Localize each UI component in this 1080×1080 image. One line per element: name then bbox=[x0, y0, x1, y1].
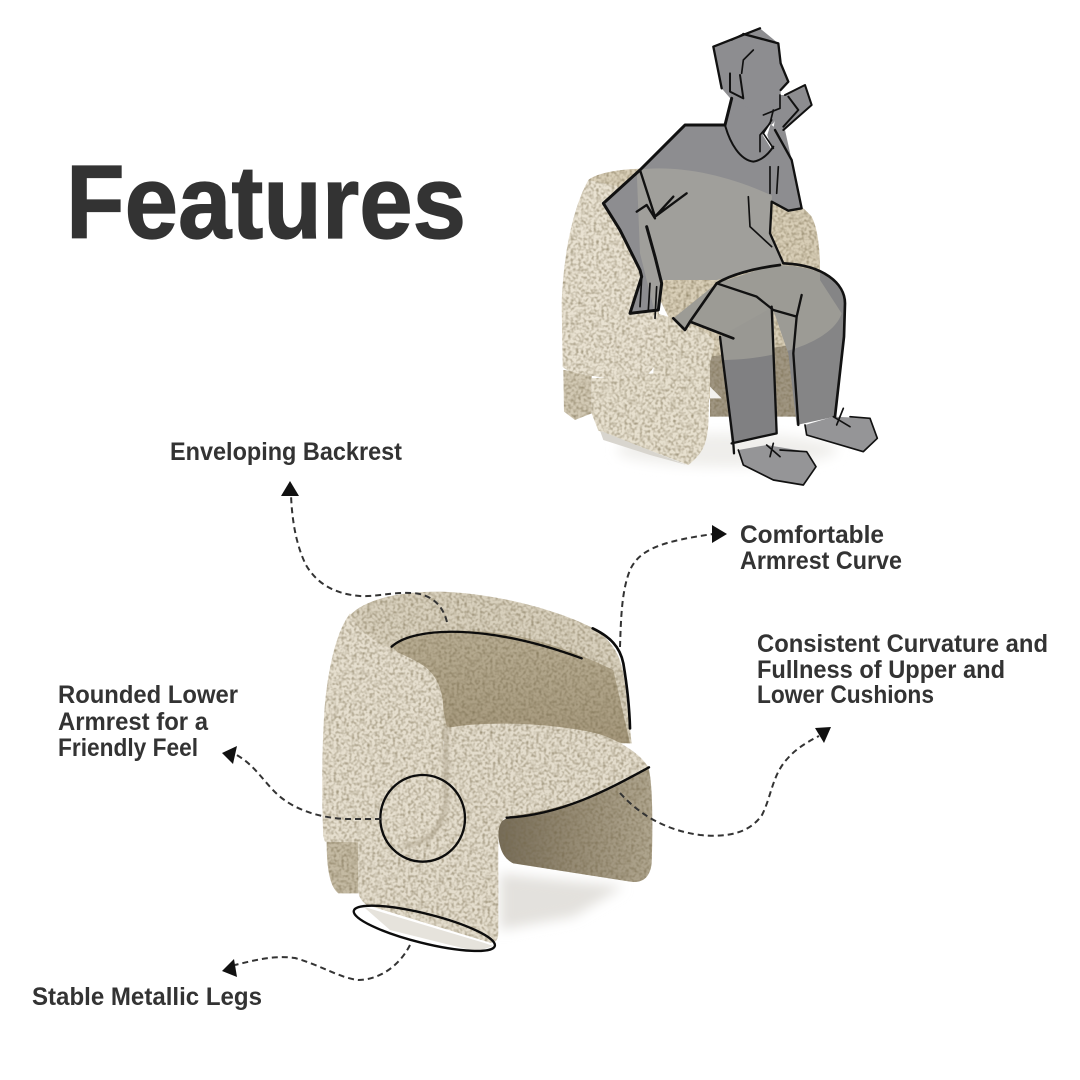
person ink outline bbox=[603, 28, 877, 485]
arrow: lower armrest bbox=[222, 746, 381, 819]
label: lower armrest bbox=[58, 681, 238, 762]
label: cushions: Lower Cushions bbox=[757, 681, 934, 709]
arrow: cushions bbox=[620, 727, 831, 836]
ellipse: metallic leg bbox=[350, 897, 498, 960]
person silhouette bbox=[603, 28, 877, 485]
metal leg base bbox=[363, 907, 493, 952]
arm crease shadow bbox=[403, 727, 446, 846]
label: metallic legs: Stable Metallic Legs bbox=[32, 983, 262, 1011]
label: cushions bbox=[757, 630, 1048, 709]
chair body bbox=[322, 592, 652, 943]
arrow: metallic legs bbox=[222, 945, 410, 980]
lower annotated chair bbox=[322, 592, 652, 960]
label: armrest curve: Armrest Curve bbox=[740, 547, 902, 575]
floor shadow bbox=[500, 873, 623, 930]
label: cushions: Consistent Curvature and bbox=[757, 630, 1048, 658]
highlight lines bbox=[392, 628, 649, 818]
circle: lower armrest bbox=[380, 775, 465, 862]
label: armrest curve: Comfortable bbox=[740, 521, 884, 549]
title: Features bbox=[66, 145, 466, 261]
label: lower armrest: Friendly Feel bbox=[58, 734, 198, 762]
label: lower armrest: Rounded Lower bbox=[58, 681, 238, 709]
label: enveloping backrest: Enveloping Backrest bbox=[170, 438, 403, 466]
illustration: sitting person on chair bbox=[562, 28, 877, 485]
label: armrest curve bbox=[740, 521, 902, 575]
label: lower armrest: Armrest for a bbox=[58, 708, 209, 736]
arrow: armrest curve bbox=[620, 525, 727, 647]
arrow: enveloping backrest bbox=[281, 481, 447, 622]
label: cushions: Fullness of Upper and bbox=[757, 656, 1005, 684]
upper chair bbox=[562, 168, 837, 467]
